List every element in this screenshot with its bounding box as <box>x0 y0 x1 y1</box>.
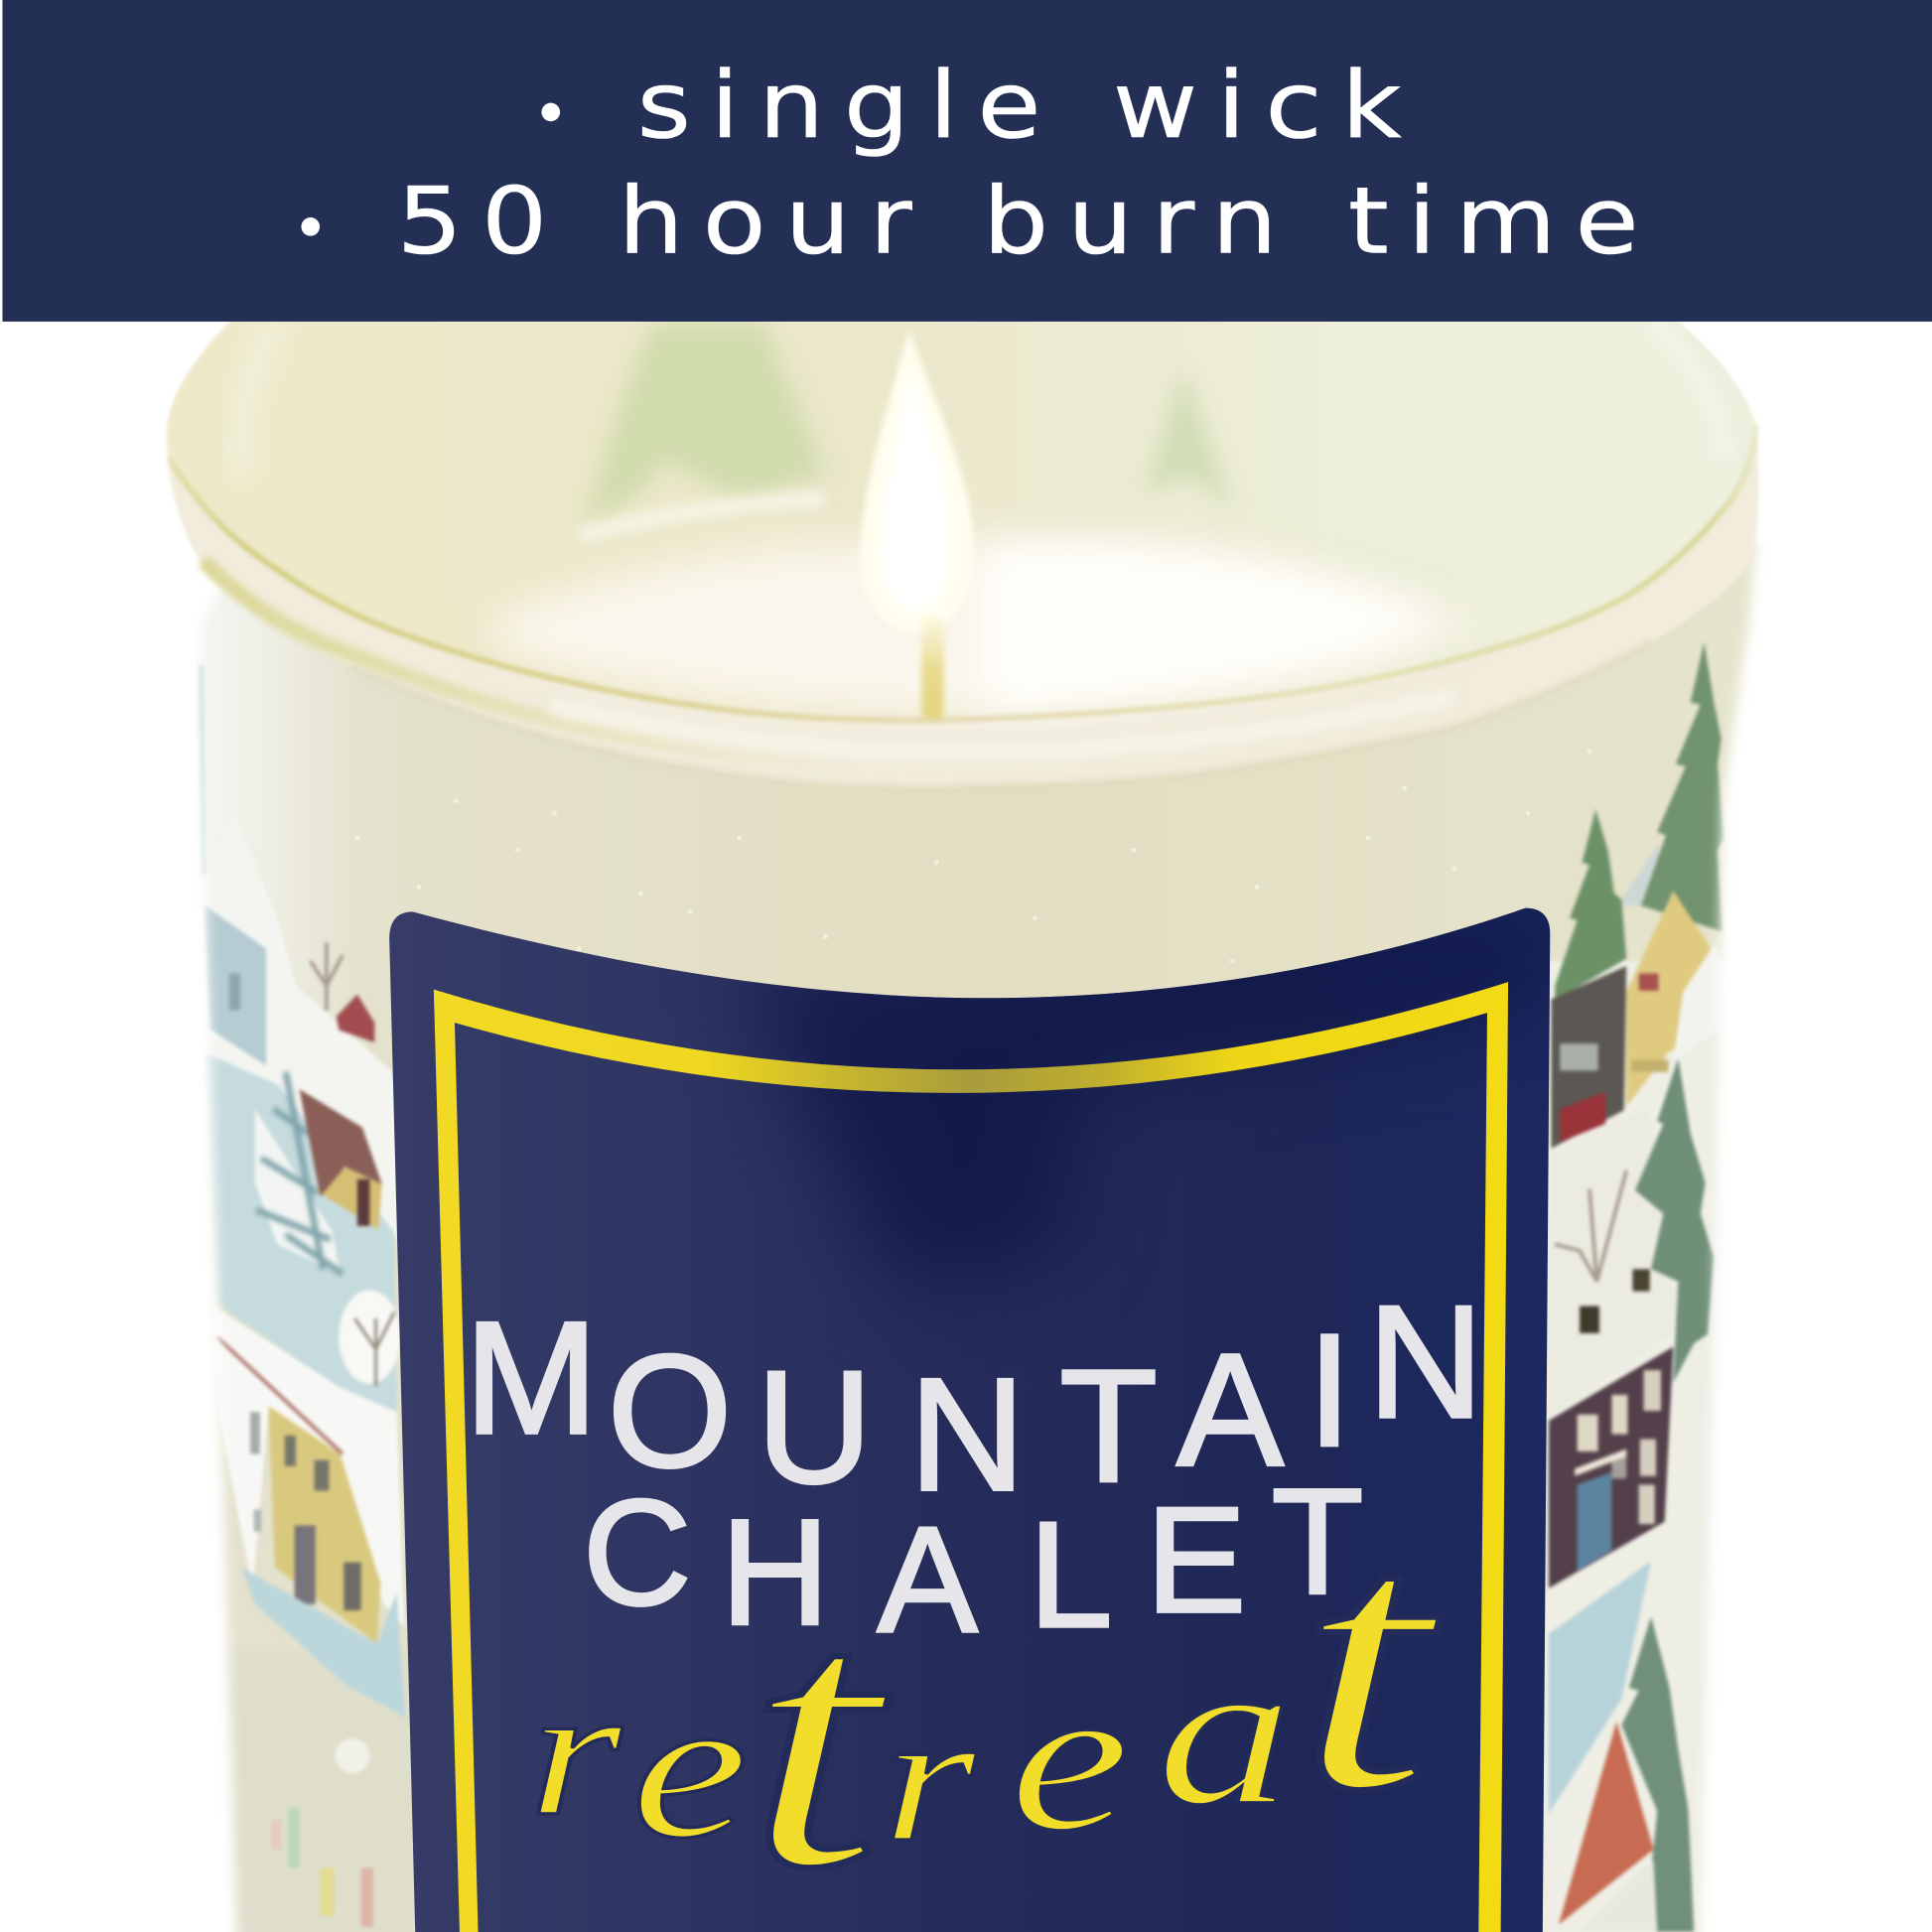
small red cabin <box>337 995 374 1042</box>
rim lower line <box>349 642 1651 787</box>
middle pine <box>1635 1058 1714 1382</box>
tall pine <box>1641 642 1724 931</box>
label script: retreat: t <box>1298 1457 1448 1867</box>
wick <box>921 617 944 720</box>
snowy mountain <box>1621 847 1660 906</box>
lower pine <box>1621 1616 1694 1932</box>
bullet: single wick: single wick <box>637 52 1402 159</box>
label title: Mountain: MOUNTAIN <box>465 1273 1483 1524</box>
jar rim and wax surface <box>167 322 1758 787</box>
label script: retreat: r <box>883 1675 977 1879</box>
jar interior <box>169 322 1757 720</box>
snow hill with bare trees <box>1549 1106 1678 1418</box>
reflected tree left <box>586 323 826 523</box>
bullet: 50 hour burn time: 50 hour burn time <box>397 168 1639 275</box>
reflected tree right <box>1146 369 1232 511</box>
glass highlights <box>239 323 277 475</box>
label script: retreat: e <box>1009 1642 1130 1873</box>
snow speckles <box>354 750 1591 964</box>
candle jar <box>167 322 1774 1932</box>
reflected snow highlight <box>579 499 826 536</box>
candle flame <box>860 331 974 720</box>
rim front line <box>169 425 1757 720</box>
yellow chalet <box>1626 891 1713 1106</box>
jar body <box>185 542 1774 1932</box>
label script: retreat <box>528 1457 1448 1932</box>
rim lip shading <box>204 561 838 766</box>
snow hill and yellow house <box>213 1307 404 1626</box>
label shadow <box>740 899 1553 1294</box>
header banner <box>2 0 1932 322</box>
lip reflection <box>550 696 1453 752</box>
dark townhouse <box>1552 966 1626 1149</box>
label title: Chalet: CHALET <box>583 1458 1363 1664</box>
product label <box>389 899 1553 1932</box>
gold border <box>434 982 1508 1932</box>
tan cabin <box>315 1166 384 1231</box>
skaters <box>271 1820 281 1850</box>
blue band <box>241 1568 405 1718</box>
orange roof <box>1559 1722 1654 1925</box>
blue frozen field <box>1549 1561 1651 1814</box>
label script: retreat: r <box>528 1649 623 1854</box>
label script: retreat: a <box>1157 1616 1293 1848</box>
wax pool <box>492 539 1478 717</box>
left winter village illustration <box>197 664 407 1929</box>
outer lip <box>167 322 1758 787</box>
small pine <box>1555 809 1626 1001</box>
frosted tree <box>339 1290 400 1384</box>
label script: retreat: e <box>631 1655 749 1880</box>
brown lodge <box>1549 1346 1673 1588</box>
right winter village illustration <box>1543 642 1725 1932</box>
snow covered pine <box>256 1072 343 1274</box>
